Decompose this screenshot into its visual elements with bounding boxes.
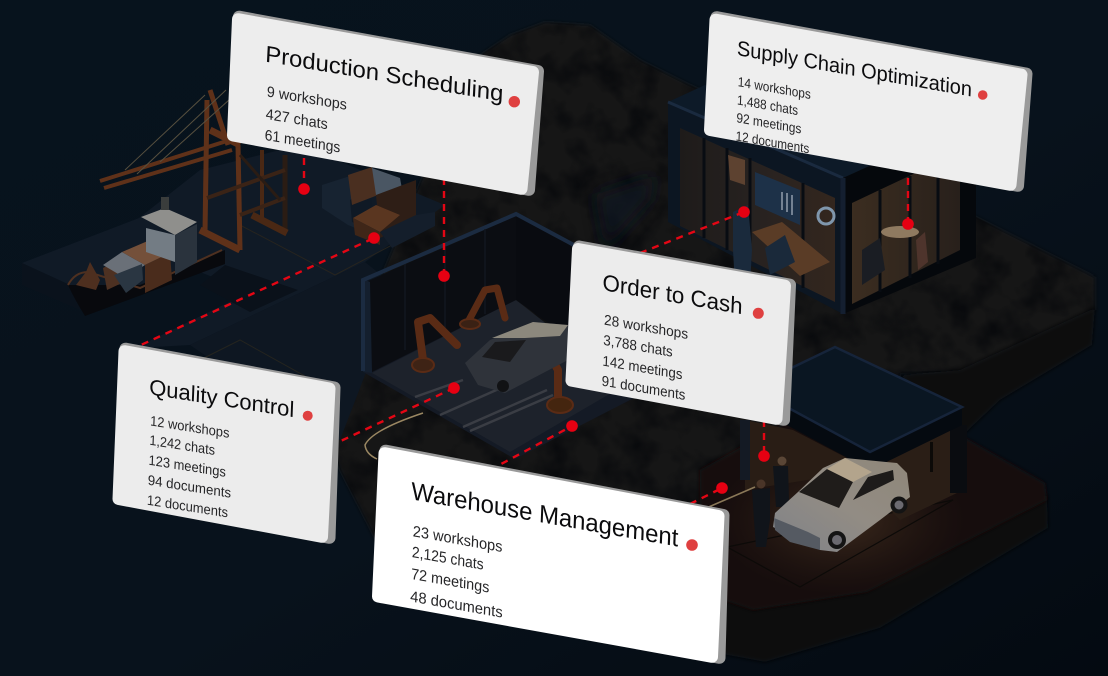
card text: Quality Control: 12 workshops xyxy=(150,412,230,441)
factory hall xyxy=(363,214,640,459)
card text: Supply Chain Optimization: Supply Chain Optimization xyxy=(737,37,972,102)
robot arms xyxy=(412,288,573,413)
card text: Warehouse Management: 72 meetings xyxy=(411,566,490,597)
card text: Warehouse Management: Warehouse Management xyxy=(411,477,679,553)
carport building xyxy=(715,347,967,595)
card text: Quality Control: Quality Control xyxy=(149,374,295,422)
card: Supply Chain Optimization xyxy=(710,17,1026,186)
card: Warehouse Management xyxy=(378,451,724,658)
card text: Quality Control: 1,242 chats xyxy=(149,432,215,458)
connector: Order to Cash to carport xyxy=(758,420,770,462)
card text: Order to Cash xyxy=(598,269,743,413)
card text: Production Scheduling: Production Scheduling xyxy=(265,41,504,106)
cargo ship xyxy=(68,197,225,316)
card text: Warehouse Management: 23 workshops xyxy=(412,523,503,556)
card text: Order to Cash: 142 meetings xyxy=(602,354,683,383)
card text: Supply Chain Optimization: 1,488 chats xyxy=(737,92,799,118)
card text: Production Scheduling: 427 chats xyxy=(265,106,329,133)
card text: Supply Chain Optimization: 14 workshops xyxy=(738,74,811,102)
connector: Warehouse Management to factory floor xyxy=(490,420,578,470)
card text: Production Scheduling: 9 workshops xyxy=(266,83,348,114)
card: Production Scheduling xyxy=(233,17,538,190)
card text: Production Scheduling: 61 meetings xyxy=(264,127,341,157)
card text: Quality Control: 12 documents xyxy=(147,492,228,520)
card text: Order to Cash: 28 workshops xyxy=(604,313,688,343)
card text: Order to Cash: Order to Cash xyxy=(602,269,743,319)
card text: Order to Cash: 3,788 chats xyxy=(603,333,673,361)
card: Order to Cash xyxy=(572,246,790,420)
card text: Warehouse Management: 2,125 chats xyxy=(412,544,484,574)
connector lines and markers xyxy=(130,145,914,504)
card: Quality Control xyxy=(118,349,334,538)
connector: Production Scheduling to factory xyxy=(438,178,450,282)
car on assembly line xyxy=(465,322,568,393)
connector: Quality Control to assembly line xyxy=(330,382,460,446)
silver car xyxy=(773,458,910,552)
connector: Warehouse Management to carport xyxy=(690,482,728,504)
connector: Quality Control to containers xyxy=(130,232,380,350)
card text: Quality Control: 94 documents xyxy=(147,472,231,501)
road light trail xyxy=(365,413,423,459)
card text: Warehouse Management: 48 documents xyxy=(410,588,503,622)
card text: Quality Control: 123 meetings xyxy=(148,452,226,480)
land mass xyxy=(330,22,1095,662)
card text: Quality Control xyxy=(144,374,295,530)
card text: Supply Chain Optimization: 92 meetings xyxy=(736,110,802,137)
card text: Order to Cash: 91 documents xyxy=(601,374,686,404)
harbour dock xyxy=(22,145,445,440)
card text: Supply Chain Optimization: 12 documents xyxy=(735,128,810,156)
container stacks xyxy=(322,167,435,248)
card text: Warehouse Management xyxy=(407,477,679,652)
connector: Supply Chain to office xyxy=(902,165,914,230)
card text: Production Scheduling xyxy=(261,41,504,183)
two people xyxy=(752,456,789,547)
harbour crane xyxy=(100,90,287,250)
connector: Production Scheduling to crane xyxy=(298,145,310,195)
office building xyxy=(668,85,976,314)
connector: Order to Cash to office xyxy=(640,206,750,253)
card text: Supply Chain Optimization xyxy=(733,37,972,185)
path light strip xyxy=(697,487,755,512)
